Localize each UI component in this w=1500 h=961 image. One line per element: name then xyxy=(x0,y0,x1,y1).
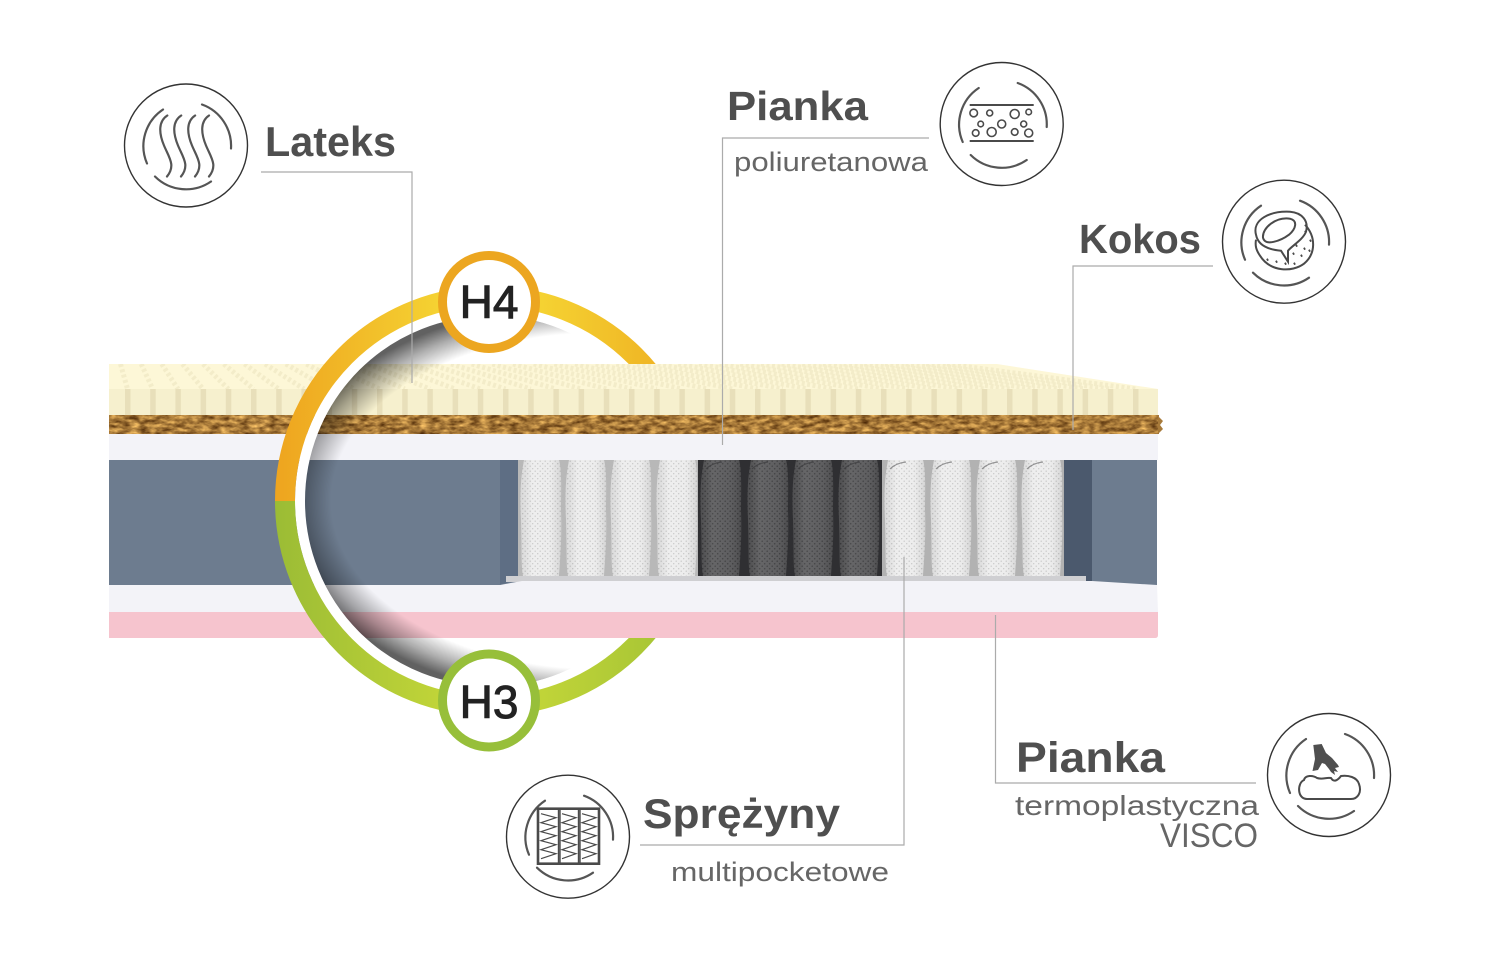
label: Pianka termoplastyczna VISCO xyxy=(1015,734,1259,855)
lens shadow xyxy=(305,321,568,681)
H3 badge: H3 xyxy=(460,676,518,728)
H4 badge: H4 xyxy=(460,276,518,328)
label: Sprężyny multipocketowe xyxy=(643,790,889,887)
label: Pianka termoplastyczna VISCO: Pianka xyxy=(1016,734,1166,782)
H4 badge xyxy=(442,256,536,348)
ring: front left half xyxy=(285,296,490,706)
pocket springs xyxy=(506,460,1086,582)
ring: back right half behind mattress xyxy=(490,296,695,706)
label: Sprężyny multipocketowe: Sprężyny xyxy=(643,790,841,837)
label: Pianka termoplastyczna VISCO: VISCO xyxy=(1160,817,1258,855)
coconut layer xyxy=(109,415,1163,434)
pink visco layer xyxy=(109,612,1158,638)
lower white foam layer xyxy=(109,581,1158,612)
mattress cross-section xyxy=(109,364,1163,638)
label: Pianka poliuretanowa xyxy=(727,83,929,177)
label: Pianka poliuretanowa: poliuretanowa xyxy=(734,147,929,177)
H3 badge xyxy=(442,654,536,747)
blue foam frame xyxy=(109,460,1157,585)
label: Kokos: Kokos xyxy=(1079,216,1201,262)
label: Pianka poliuretanowa: Pianka xyxy=(727,83,869,129)
label: Sprężyny multipocketowe: multipocketowe xyxy=(671,857,889,887)
upper white foam layer xyxy=(109,434,1158,460)
label: Lateks: Lateks xyxy=(265,118,396,165)
icon: foam xyxy=(940,62,1063,186)
icon: hand on memory foam xyxy=(1268,714,1390,836)
icon: coconut xyxy=(1222,180,1346,303)
icon: springs xyxy=(506,775,630,898)
icon: latex waves xyxy=(124,84,248,207)
label: Pianka termoplastyczna VISCO: termoplastyczna xyxy=(1015,790,1259,821)
ring: white inner band xyxy=(300,311,490,691)
latex layer xyxy=(109,364,1158,415)
leader lines xyxy=(261,138,1256,845)
